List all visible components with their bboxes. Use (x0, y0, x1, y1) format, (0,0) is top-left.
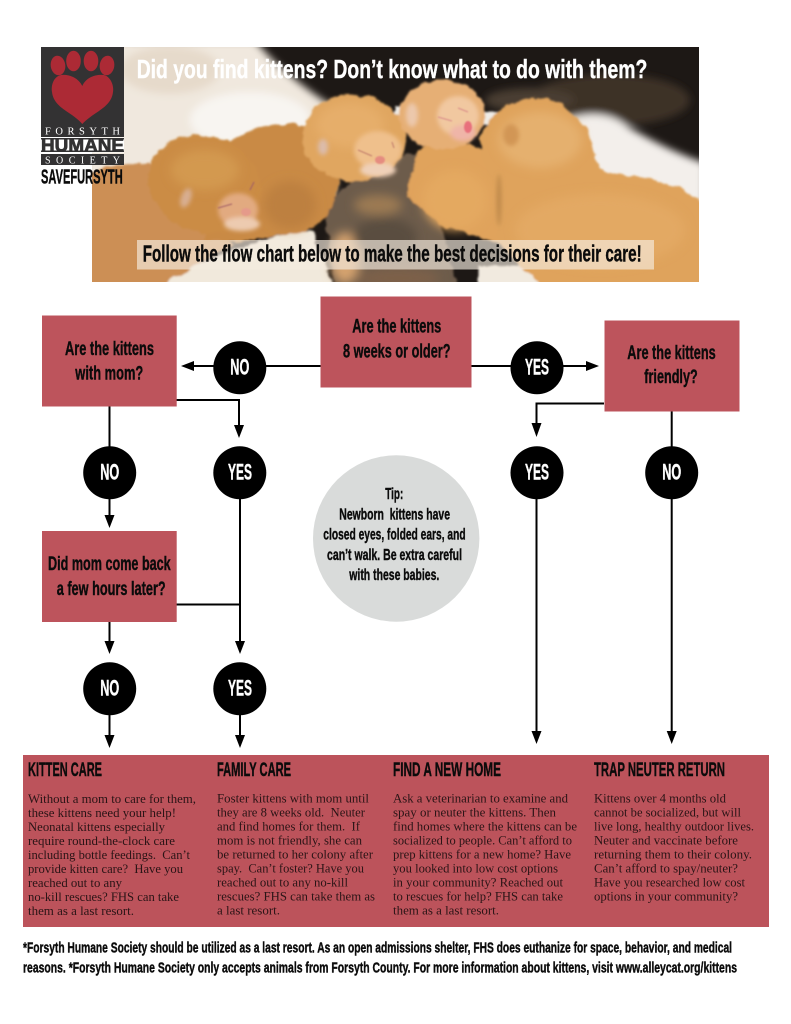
logo: Forsyth Humane Society (41, 47, 124, 188)
tip callout: Tip: (385, 486, 403, 503)
question: mom came back (42, 531, 177, 622)
outcome: kitten care: Without a mom to care for them, (28, 792, 196, 806)
outcome: family care: mom is not friendly, she can (217, 834, 362, 848)
outcome: trap neuter return: Neuter and vaccinate before (594, 833, 739, 847)
decision: yes (mom returned): YES (228, 676, 252, 701)
outcome: kitten care: reached out to any (28, 876, 123, 890)
decision: yes (with mom): YES (228, 460, 252, 484)
decision: no (without mom): NO (100, 460, 119, 484)
outcome: kitten care: no-kill rescues? FHS can take (28, 890, 180, 904)
outcome: kitten care: require round-the-clock care (28, 834, 176, 848)
decision: yes (mom returned) (213, 662, 266, 715)
question: 8 weeks or older: 8 weeks or older? (343, 341, 450, 363)
outcome: trap neuter return: Kittens over 4 months old (594, 791, 726, 805)
outcome: family care: be returned to her colony after (217, 848, 373, 862)
question: mom came back: Did mom come back (48, 553, 171, 575)
tip callout: with these babies. (349, 567, 439, 584)
outcome: find a new home: Ask a veterinarian to examine and (393, 791, 568, 805)
decision: no (not friendly): NO (662, 460, 681, 484)
outcome: kitten care: provide kitten care? Have you (28, 862, 183, 876)
question: friendly (604, 320, 740, 412)
question: 8 weeks or older (320, 296, 472, 388)
outcome: family care: Foster kittens with mom until (217, 792, 370, 806)
header banner (41, 40, 705, 290)
decision: yes (friendly) (510, 446, 564, 499)
logo: Forsyth Humane Society: SAVEFURSYTH (41, 166, 123, 188)
decision: no (without mom) (83, 446, 136, 499)
outcome: kitten care: KITTEN CARE (28, 759, 102, 781)
outcome: find a new home: in your community? Reached out (393, 875, 564, 889)
decision: no (under 8 weeks): NO (230, 354, 249, 380)
outcome: family care: a last resort. (217, 904, 280, 918)
logo paw and heart (49, 51, 116, 124)
question: friendly: Are the kittens (627, 342, 716, 364)
outcome: family care: FAMILY CARE (217, 759, 291, 781)
outcome: trap neuter return: live long, healthy outdoor lives. (594, 819, 754, 833)
question: with mom (42, 316, 177, 406)
tip callout (313, 455, 479, 622)
logo: Forsyth Humane Society: SOCIETY (45, 155, 120, 166)
photo: sleeping kittens on a blanket (85, 40, 705, 290)
outcome: kitten care: these kittens need your help! (28, 806, 176, 820)
outcome: find a new home: you looked into low cost options (393, 861, 558, 875)
outcome: trap neuter return: options in your community? (594, 889, 738, 903)
decision: no (under 8 weeks) (213, 341, 266, 394)
decision: yes (8 weeks or older) (510, 341, 564, 394)
outcome: trap neuter return (594, 759, 754, 903)
outcome: find a new home: find homes where the kittens can be (393, 819, 578, 833)
outcome: family care: and find homes for them. If (217, 820, 361, 834)
question: 8 weeks or older: Are the kittens (352, 316, 441, 338)
outcome: kitten care: them as a last resort. (28, 904, 134, 918)
outcome: find a new home: them as a last resort. (393, 903, 499, 917)
flow chart connectors and arrows (104, 361, 677, 748)
decision: yes (with mom) (213, 446, 266, 499)
footnote (23, 940, 737, 977)
outcome: find a new home: socialized to people. Can’t afford to (393, 833, 572, 847)
decision: no (mom did not return) (83, 662, 136, 715)
question: mom came back: a few hours later? (57, 578, 166, 600)
logo: Forsyth Humane Society: HUMANE (41, 136, 124, 156)
question: with mom: Are the kittens (65, 338, 154, 360)
outcome: trap neuter return: cannot be socialized, but will (594, 805, 742, 819)
outcome: find a new home: spay or neuter the kittens. Then (393, 805, 556, 819)
outcome: trap neuter return: returning them to their colony. (594, 847, 752, 861)
decision: yes (8 weeks or older): YES (525, 354, 549, 380)
outcome: kitten care: including bottle feedings. Can’t (28, 848, 191, 862)
question: friendly: friendly? (644, 366, 698, 388)
outcome: kitten care (28, 759, 196, 918)
tip callout: Newborn kittens have (339, 506, 450, 523)
outcome: find a new home: prep kittens for a new home? Have (393, 847, 572, 861)
outcome: family care: rescues? FHS can take them as (217, 890, 375, 904)
decision: yes (friendly): YES (525, 460, 549, 484)
outcome: trap neuter return: Have you researched low cost (594, 875, 746, 889)
tip callout: closed eyes, folded ears, and (323, 527, 466, 544)
decision: no (mom did not return): NO (100, 676, 119, 701)
panel: outcomes (23, 755, 769, 927)
outcome: family care: reached out to any no-kill (217, 876, 349, 890)
tip callout: can’t walk. Be extra careful (327, 547, 462, 564)
outcome: family care (217, 759, 375, 918)
outcome: family care: they are 8 weeks old. Neuter (217, 806, 365, 820)
outcome: find a new home (393, 759, 578, 917)
outcome: family care: spay. Can’t foster? Have you (217, 862, 364, 876)
outcome: find a new home: to rescues for help? FHS can take (393, 889, 564, 903)
outcome: find a new home: FIND A NEW HOME (393, 759, 501, 781)
question: with mom: with mom? (75, 362, 143, 384)
logo: Forsyth Humane Society: FORSYTH (45, 127, 120, 138)
decision: no (not friendly) (645, 446, 698, 499)
outcome: kitten care: Neonatal kittens especially (28, 820, 166, 834)
outcome: trap neuter return: Can’t afford to spay/neuter? (594, 861, 738, 875)
